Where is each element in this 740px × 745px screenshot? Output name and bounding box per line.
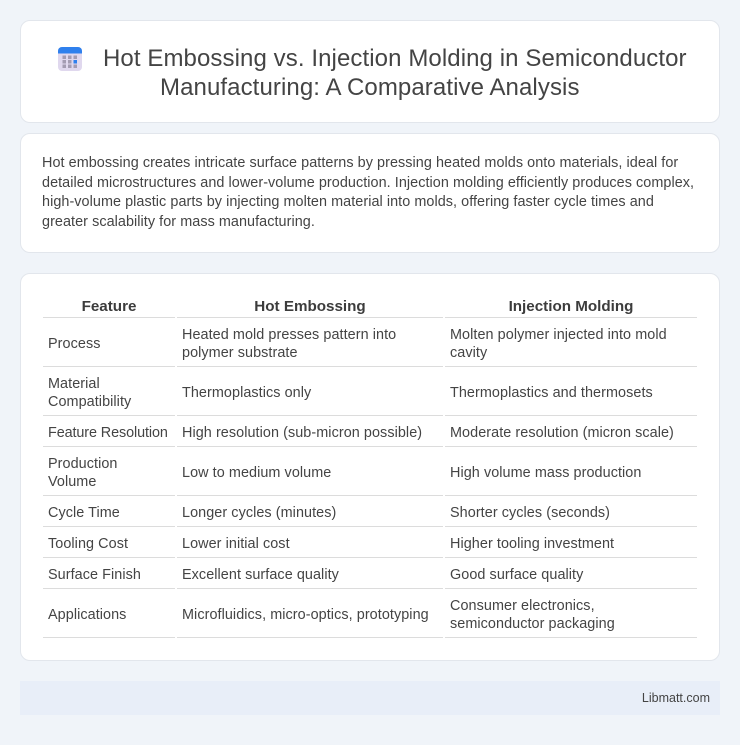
row: Tooling Cost: Higher tooling investment (450, 536, 614, 552)
header: Injection Molding: Injection Molding (509, 298, 633, 315)
row: Applications: Microfluidics, micro-optics, prototyping (182, 607, 429, 623)
icon: calendar (58, 47, 82, 71)
row: Feature Resolution: Moderate resolution (micron scale) (450, 425, 674, 441)
title: Manufacturing: A Comparative Analysis (160, 74, 580, 101)
row: Production Volume: Production (48, 456, 118, 472)
row: Applications: Applications (48, 607, 126, 623)
row: Feature Resolution: Feature Resolution (48, 425, 168, 441)
footer credit: Libmatt.com (642, 691, 710, 705)
row: Tooling Cost: Lower initial cost (182, 536, 290, 552)
comparison table (43, 298, 697, 638)
row: Surface Finish: Excellent surface quality (182, 567, 339, 583)
intro paragraph (42, 155, 694, 230)
row: Applications: semiconductor packaging (450, 616, 615, 632)
row: Process: Heated mold presses pattern into (182, 327, 396, 343)
row: Material Compatibility: Thermoplastics only (182, 385, 311, 401)
row: Tooling Cost (48, 536, 614, 552)
row: Surface Finish: Surface Finish (48, 567, 141, 583)
row: Process: cavity (450, 345, 487, 361)
row: Process (48, 327, 667, 361)
row: Feature Resolution: High resolution (sub-micron possible) (182, 425, 422, 441)
row: Material Compatibility: Compatibility (48, 394, 131, 410)
row: Production Volume (48, 456, 641, 490)
header: Hot Embossing: Hot Embossing (254, 298, 366, 315)
intro paragraph: Hot embossing creates intricate surface patterns by pressing heated molds onto materials, ideal for (42, 155, 678, 171)
row: Process: Process (48, 336, 100, 352)
title: Hot Embossing vs. Injection Molding in Semiconductor (103, 45, 687, 72)
row: Cycle Time (48, 505, 610, 521)
title (103, 45, 687, 101)
row: Production Volume: Low to medium volume (182, 465, 331, 481)
intro paragraph: greater scalability for mass manufacturing. (42, 214, 315, 230)
row: Production Volume: High volume mass production (450, 465, 641, 481)
row: Surface Finish: Good surface quality (450, 567, 583, 583)
row: Material Compatibility: Material (48, 376, 100, 392)
intro text card (20, 133, 720, 253)
intro paragraph: high-volume plastic parts by injecting molten material into molds, offering faster cycle times and (42, 194, 654, 210)
header: Feature: Feature (82, 298, 136, 315)
title card (20, 20, 720, 123)
row: Production Volume: Volume (48, 474, 96, 490)
row: Process: polymer substrate (182, 345, 298, 361)
row: Cycle Time: Longer cycles (minutes) (182, 505, 336, 521)
row: Cycle Time: Shorter cycles (seconds) (450, 505, 610, 521)
row: Material Compatibility (48, 376, 653, 410)
row: Process: Molten polymer injected into mold (450, 327, 667, 343)
row: Applications: Consumer electronics, (450, 598, 595, 614)
row: Cycle Time: Cycle Time (48, 505, 120, 521)
comparison table card (20, 273, 720, 661)
row: Feature Resolution (48, 425, 674, 441)
intro paragraph: detailed microstructures and lower-volume production. Injection molding efficiently produces complex, (42, 174, 694, 190)
row: Material Compatibility: Thermoplastics and thermosets (450, 385, 653, 401)
row: Applications (48, 598, 615, 632)
row: Tooling Cost: Tooling Cost (48, 536, 128, 552)
row: Surface Finish (48, 567, 584, 583)
footer bar (20, 681, 720, 715)
